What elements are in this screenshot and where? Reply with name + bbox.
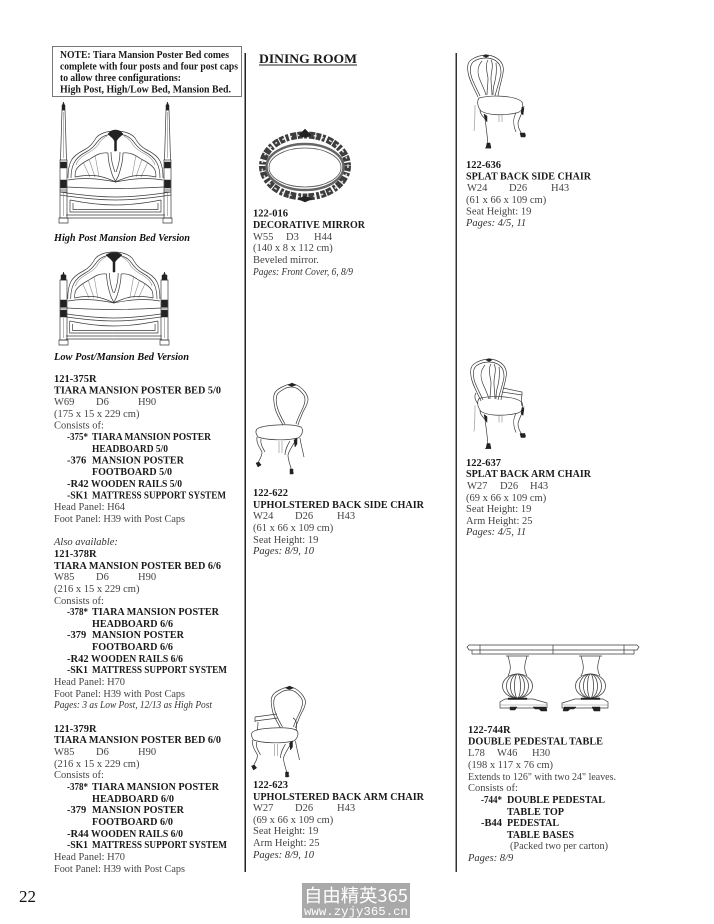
- product: 121-379R bed 6/0: TIARA MANSION POSTER: [92, 782, 219, 793]
- product: 122-637 splat arm chair: (69 x 66 x 109 cm): [466, 493, 547, 504]
- product: 121-378R bed 6/6: Consists of:: [54, 596, 104, 607]
- product: 122-637 splat arm chair: Arm Height: 25: [466, 516, 532, 527]
- product: 122-636 splat side chair: 122-636: [466, 160, 501, 171]
- product: 122-744R double pedestal table: DOUBLE PEDESTAL TABLE: [468, 736, 603, 748]
- product: 122-637 splat arm chair: SPLAT BACK ARM CHAIR: [466, 469, 591, 480]
- watermark badge: www.zyjy365.cn: [304, 905, 408, 919]
- product: 121-378R bed 6/6: H90: [138, 572, 156, 583]
- product: 121-379R bed 6/0: MANSION POSTER: [92, 805, 184, 816]
- product: 122-636 splat side chair: H43: [551, 183, 569, 194]
- product: 122-636 splat side chair: [465, 160, 591, 229]
- product: 122-744R double pedestal table: (198 x 117 x 76 cm): [468, 760, 554, 771]
- product: 122-623 arm chair: [252, 780, 424, 861]
- product: 122-637 splat arm chair: [465, 458, 591, 538]
- icon: double pedestal table: [467, 645, 639, 711]
- icon: splat back side chair: [468, 54, 525, 148]
- product: 121-379R bed 6/0: Consists of:: [54, 770, 104, 781]
- product: 122-744R double pedestal table: 122-744R: [468, 725, 511, 736]
- product: 122-623 arm chair: Seat Height: 19: [253, 826, 318, 837]
- product: 122-744R double pedestal table: -744*: [481, 795, 502, 806]
- product: 121-379R bed 6/0: Head Panel: H70: [54, 852, 125, 863]
- product: 121-379R bed 6/0: -379: [67, 805, 86, 816]
- product: 121-378R bed 6/6: Foot Panel: H39 with Post Caps: [54, 689, 185, 700]
- product: 122-016 mirror: Pages: Front Cover, 6, 8/9: [252, 267, 354, 278]
- product: 122-744R double pedestal table: DOUBLE PEDESTAL: [507, 795, 605, 806]
- product: 121-379R bed 6/0: -R44: [67, 829, 89, 840]
- product: 121-378R bed 6/6: Also available:: [53, 537, 118, 548]
- product: 122-744R double pedestal table: (Packed two per carton): [510, 841, 608, 852]
- product: 122-016 mirror: 122-016: [253, 208, 288, 220]
- product: 122-744R double pedestal table: -B44: [481, 818, 503, 829]
- product: 121-375R bed 5/0: TIARA MANSION POSTER BED 5/0: [54, 386, 221, 397]
- product: 122-744R double pedestal table: Pages: 8/9: [467, 853, 514, 864]
- product: 121-379R bed 6/0: (216 x 15 x 229 cm): [54, 759, 140, 770]
- product: 122-622 side chair: H43: [337, 511, 355, 522]
- product: 121-378R bed 6/6: TIARA MANSION POSTER: [92, 607, 219, 618]
- product: 122-623 arm chair: Arm Height: 25: [253, 838, 320, 849]
- product: 122-622 side chair: [252, 488, 424, 557]
- product: 121-378R bed 6/6: WOODEN RAILS 6/6: [91, 654, 183, 665]
- column rule left: [244, 53, 246, 872]
- product: 121-379R bed 6/0: MATTRESS SUPPORT SYSTEM: [92, 840, 227, 851]
- product: 121-379R bed 6/0: 121-379R: [54, 724, 97, 735]
- product: 121-375R bed 5/0: Head Panel: H64: [54, 502, 126, 513]
- product: 121-375R bed 5/0: -R42: [67, 479, 89, 490]
- product: 121-375R bed 5/0: [54, 374, 226, 525]
- product: 122-637 splat arm chair: H43: [530, 481, 548, 492]
- product: 122-623 arm chair: W27: [253, 803, 273, 814]
- product: 121-375R bed 5/0: H90: [138, 397, 156, 408]
- caption: low post bed: Low Post/Mansion Bed Version: [53, 351, 189, 363]
- product: 122-622 side chair: Seat Height: 19: [253, 535, 318, 546]
- product: 121-378R bed 6/6: -378*: [67, 607, 88, 618]
- product: 121-375R bed 5/0: -376: [67, 456, 86, 466]
- product: 122-636 splat side chair: (61 x 66 x 109 cm): [466, 195, 547, 206]
- product: 122-744R double pedestal table: TABLE TOP: [507, 807, 565, 818]
- product: 121-378R bed 6/6: D6: [96, 572, 109, 583]
- product: 122-622 side chair: D26: [295, 511, 313, 522]
- note box: to allow three configurations:: [60, 73, 181, 84]
- product: 122-016 mirror: W55: [253, 232, 273, 243]
- product: 121-378R bed 6/6: -SK1: [67, 665, 88, 676]
- product: 122-637 splat arm chair: 122-637: [466, 458, 501, 469]
- product: 121-379R bed 6/0: TIARA MANSION POSTER BED 6/0: [54, 735, 221, 746]
- product: 122-744R double pedestal table: PEDESTAL: [507, 818, 559, 829]
- product: 121-375R bed 5/0: (175 x 15 x 229 cm): [54, 409, 140, 420]
- note box: High Post, High/Low Bed, Mansion Bed.: [60, 84, 231, 96]
- product: 121-379R bed 6/0: HEADBOARD 6/0: [92, 794, 174, 805]
- product: 121-375R bed 5/0: -375*: [67, 432, 88, 443]
- product: 121-375R bed 5/0: Consists of:: [54, 420, 104, 432]
- product: 121-379R bed 6/0: FOOTBOARD 6/0: [92, 817, 173, 828]
- product: 122-636 splat side chair: Seat Height: 19: [466, 206, 531, 218]
- product: 121-378R bed 6/6: FOOTBOARD 6/6: [92, 642, 173, 653]
- product: 122-636 splat side chair: W24: [467, 183, 488, 194]
- product: 122-744R double pedestal table: L78: [468, 748, 485, 759]
- product: 122-622 side chair: Pages: 8/9, 10: [252, 546, 315, 557]
- product: 121-378R bed 6/6: HEADBOARD 6/6: [92, 619, 173, 630]
- product: 122-636 splat side chair: Pages: 4/5, 11: [465, 218, 526, 229]
- product: 122-744R double pedestal table: Consists of:: [468, 783, 518, 794]
- product: 122-623 arm chair: H43: [337, 803, 355, 814]
- watermark badge: 自由精英365: [304, 882, 408, 908]
- product: 122-623 arm chair: 122-623: [253, 780, 288, 791]
- page number: 22: [19, 887, 36, 906]
- icon: splat back arm chair: [471, 358, 525, 448]
- note box: complete with four posts and four post caps: [60, 62, 238, 72]
- icon: upholstered side chair: [256, 383, 308, 474]
- product: 122-744R double pedestal table: Extends to 126" with two 24" leaves.: [468, 772, 616, 783]
- product: 121-378R bed 6/6: W85: [54, 572, 74, 583]
- product: 121-379R bed 6/0: D6: [96, 747, 109, 758]
- product: 121-378R bed 6/6: Pages: 3 as Low Post, 12/13 as High Post: [53, 700, 213, 711]
- product: 121-375R bed 5/0: MANSION POSTER: [92, 456, 184, 466]
- product: 122-622 side chair: W24: [253, 511, 274, 522]
- note box: [52, 46, 242, 96]
- product: 122-744R double pedestal table: W46: [497, 748, 517, 759]
- product: 121-375R bed 5/0: TIARA MANSION POSTER: [92, 432, 211, 443]
- product: 121-375R bed 5/0: FOOTBOARD 5/0: [92, 467, 172, 478]
- heading: dining room: DINING ROOM: [259, 51, 357, 66]
- product: 121-375R bed 5/0: D6: [96, 397, 109, 408]
- product: 121-378R bed 6/6: MANSION POSTER: [92, 630, 184, 641]
- product: 122-016 mirror: H44: [314, 232, 333, 243]
- icon: upholstered arm chair: [251, 686, 306, 777]
- product: 122-016 mirror: (140 x 8 x 112 cm): [253, 243, 333, 254]
- product: 121-375R bed 5/0: -SK1: [67, 490, 88, 502]
- product: 121-375R bed 5/0: WOODEN RAILS 5/0: [91, 479, 182, 490]
- note box: NOTE: Tiara Mansion Poster Bed comes: [60, 50, 229, 61]
- product: 121-378R bed 6/6: -R42: [67, 654, 89, 665]
- product: 122-636 splat side chair: D26: [509, 183, 527, 194]
- product: 121-379R bed 6/0: Foot Panel: H39 with Post Caps: [54, 864, 185, 875]
- product: 121-378R bed 6/6: TIARA MANSION POSTER BED 6/6: [54, 561, 221, 572]
- column rule right: [456, 53, 457, 872]
- product: 121-378R bed 6/6: (216 x 15 x 229 cm): [54, 584, 140, 595]
- icon: high post bed: [59, 102, 172, 223]
- product: 121-378R bed 6/6: 121-378R: [54, 549, 97, 560]
- product: 122-622 side chair: (61 x 66 x 109 cm): [253, 523, 334, 534]
- product: 122-637 splat arm chair: W27: [467, 481, 487, 492]
- product: 121-379R bed 6/0: H90: [138, 747, 156, 758]
- product: 122-016 mirror: [252, 208, 365, 278]
- product: 122-637 splat arm chair: D26: [500, 481, 518, 492]
- product: 122-636 splat side chair: SPLAT BACK SIDE CHAIR: [466, 172, 591, 183]
- watermark badge: [302, 882, 410, 919]
- product: 122-744R double pedestal table: H30: [532, 748, 550, 759]
- product: 121-378R bed 6/6: Head Panel: H70: [54, 677, 125, 688]
- product: 121-375R bed 5/0: HEADBOARD 5/0: [92, 444, 168, 455]
- product: 122-637 splat arm chair: Seat Height: 19: [466, 504, 531, 515]
- product: 121-379R bed 6/0: W85: [54, 747, 74, 758]
- product: 121-379R bed 6/0: WOODEN RAILS 6/0: [91, 829, 183, 840]
- product: 121-378R bed 6/6: MATTRESS SUPPORT SYSTEM: [92, 665, 227, 676]
- product: 122-623 arm chair: (69 x 66 x 109 cm): [253, 815, 334, 826]
- product: 121-378R bed 6/6: -379: [67, 630, 86, 641]
- icon: low post bed: [59, 252, 169, 345]
- product: 121-379R bed 6/0: -378*: [67, 782, 88, 793]
- product: 122-622 side chair: UPHOLSTERED BACK SIDE CHAIR: [253, 500, 424, 511]
- product: 121-378R bed 6/6: [53, 537, 227, 711]
- product: 121-375R bed 5/0: Foot Panel: H39 with Post Caps: [54, 514, 185, 525]
- product: 122-016 mirror: D3: [286, 232, 299, 243]
- product: 122-744R double pedestal table: [467, 725, 616, 864]
- caption: high post bed: High Post Mansion Bed Version: [53, 232, 190, 244]
- product: 122-744R double pedestal table: TABLE BASES: [507, 830, 574, 841]
- product: 122-637 splat arm chair: Pages: 4/5, 11: [465, 527, 526, 538]
- product: 121-375R bed 5/0: MATTRESS SUPPORT SYSTEM: [92, 490, 226, 502]
- product: 121-375R bed 5/0: 121-375R: [54, 374, 97, 385]
- product: 122-623 arm chair: D26: [295, 803, 313, 814]
- product: 122-622 side chair: 122-622: [253, 488, 288, 499]
- product: 121-379R bed 6/0: [54, 724, 227, 875]
- product: 122-623 arm chair: Pages: 8/9, 10: [252, 850, 315, 861]
- product: 122-016 mirror: DECORATIVE MIRROR: [253, 220, 365, 231]
- product: 121-375R bed 5/0: W69: [54, 397, 74, 408]
- product: 122-016 mirror: Beveled mirror.: [253, 255, 319, 266]
- product: 121-379R bed 6/0: -SK1: [67, 840, 88, 851]
- icon: oval decorative mirror: [262, 129, 348, 202]
- product: 122-623 arm chair: UPHOLSTERED BACK ARM CHAIR: [253, 792, 424, 803]
